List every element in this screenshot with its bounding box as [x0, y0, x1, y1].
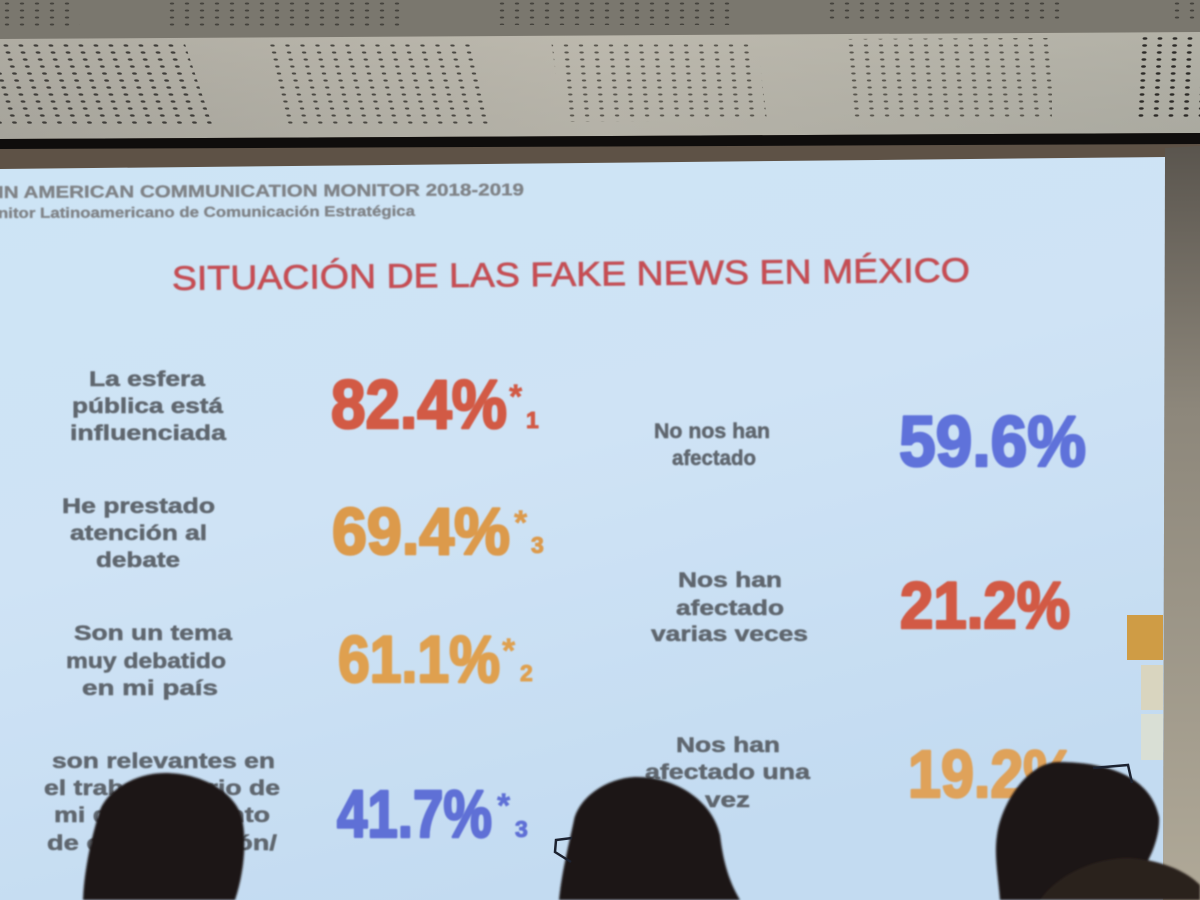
label: trabajo diario: mi departamento	[54, 804, 270, 827]
audience silhouettes	[83, 762, 1200, 900]
value 41.7%: *	[497, 787, 511, 825]
label: esfera pública: influenciada	[70, 422, 226, 445]
value 69.4%: 69.4%	[332, 494, 510, 568]
label: trabajo diario: de comunicación/	[47, 832, 277, 855]
label: atención al debate	[62, 495, 215, 572]
left stat 2	[62, 494, 544, 572]
right stat 2	[651, 568, 1070, 646]
value 41.7%: 3	[515, 816, 528, 842]
label: esfera pública: pública está	[72, 395, 223, 418]
left stat 4	[44, 750, 528, 855]
header text: IN AMERICAN COMMUNICATION MONITOR 2018-2019	[0, 180, 524, 202]
title: SITUACIÓN DE LAS FAKE NEWS EN MÉXICO	[172, 252, 970, 298]
header text: nitor Latinoamericano de Comunicación Estratégica	[0, 204, 416, 222]
value 82.4%: 82.4%	[331, 366, 507, 443]
label: atención al debate: He prestado	[62, 495, 215, 518]
label: varias veces: afectado	[676, 597, 784, 620]
wall right of screen	[1163, 146, 1200, 900]
label: una vez	[645, 734, 810, 812]
decorative colour squares	[1127, 615, 1163, 760]
label: tema debatido	[66, 622, 232, 700]
value 21.2%: 21.2%	[900, 568, 1070, 642]
ceiling	[0, 0, 1200, 140]
value 82.4%: 1	[526, 407, 539, 433]
label: no afectado: No nos han	[654, 420, 770, 443]
label: atención al debate: debate	[96, 549, 180, 572]
label: varias veces	[651, 569, 808, 646]
value 59.6%: 59.6%	[899, 403, 1086, 482]
label: atención al debate: atención al	[70, 522, 207, 545]
value 82.4%: *	[509, 378, 523, 416]
label: una vez: afectado una	[645, 761, 810, 784]
label: esfera pública: La esfera	[89, 368, 205, 391]
label: trabajo diario: el trabajo diario de	[44, 777, 280, 800]
label: esfera pública	[70, 368, 226, 445]
label: tema debatido: muy debatido	[66, 650, 226, 673]
divider line	[588, 420, 590, 810]
left stat 1	[70, 366, 539, 445]
label: una vez: Nos han	[676, 734, 780, 757]
value 61.1%: *	[502, 632, 516, 670]
label: trabajo diario	[44, 750, 280, 855]
label: trabajo diario: son relevantes en	[52, 750, 275, 773]
value 61.1%: 2	[520, 660, 533, 686]
glasses	[555, 765, 1132, 862]
value 69.4%: 3	[531, 532, 544, 558]
value 41.7%: 41.7%	[337, 777, 492, 852]
label: no afectado	[654, 420, 770, 470]
label: varias veces: Nos han	[678, 569, 782, 592]
label: tema debatido: en mi país	[82, 677, 218, 700]
right stat 3	[645, 734, 1076, 812]
header text	[0, 180, 524, 222]
left stat 3	[66, 622, 533, 700]
label: tema debatido: Son un tema	[74, 622, 232, 645]
value 19.2%: 19.2%	[908, 737, 1076, 812]
label: una vez: vez	[705, 789, 750, 812]
value 61.1%: 61.1%	[338, 622, 500, 696]
label: no afectado: afectado	[672, 447, 756, 470]
label: varias veces: varias veces	[651, 623, 808, 646]
right stat 1	[654, 403, 1086, 482]
value 69.4%: *	[514, 504, 528, 542]
